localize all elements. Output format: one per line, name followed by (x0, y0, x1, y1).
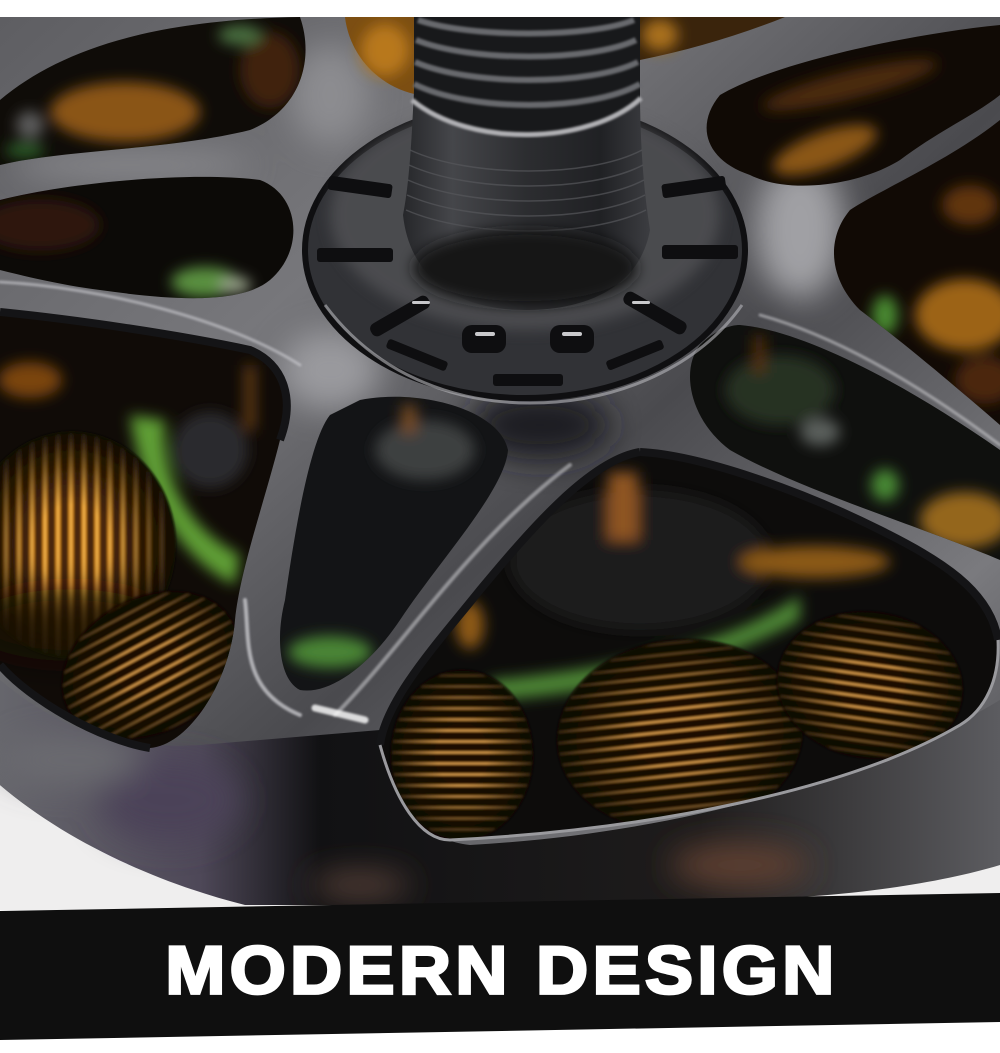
window: top right (695, 20, 1000, 190)
copper coil centre (557, 638, 802, 822)
white top margin (0, 0, 1000, 17)
rim reflections (0, 734, 810, 897)
shaft threads (414, 20, 640, 105)
threaded motor shaft (403, 17, 650, 310)
mirrored lower rim (0, 680, 1000, 905)
window: right upper (834, 120, 1000, 425)
copper coil lower left (62, 590, 234, 738)
copper coil right (776, 612, 963, 758)
copper coil bottom (390, 669, 534, 841)
hub slots (317, 176, 738, 386)
hub slot glints (412, 301, 650, 336)
light table background (0, 786, 1000, 910)
window: right middle (680, 320, 1000, 565)
metal shading (10, 45, 845, 460)
machined grooves (406, 150, 646, 231)
lower window rim (380, 640, 998, 840)
window: left upper (0, 176, 294, 298)
headline: MODERN DESIGN (165, 933, 839, 1009)
window: centre (280, 396, 508, 690)
dark window edges (0, 312, 998, 748)
window: large lower right (370, 445, 1000, 845)
spoke highlights (0, 282, 1000, 720)
top openings behind shaft (345, 17, 785, 95)
window: top left (0, 17, 320, 167)
centre hub disc (305, 100, 745, 403)
copper coil left (0, 431, 176, 659)
window: large left (0, 316, 283, 748)
